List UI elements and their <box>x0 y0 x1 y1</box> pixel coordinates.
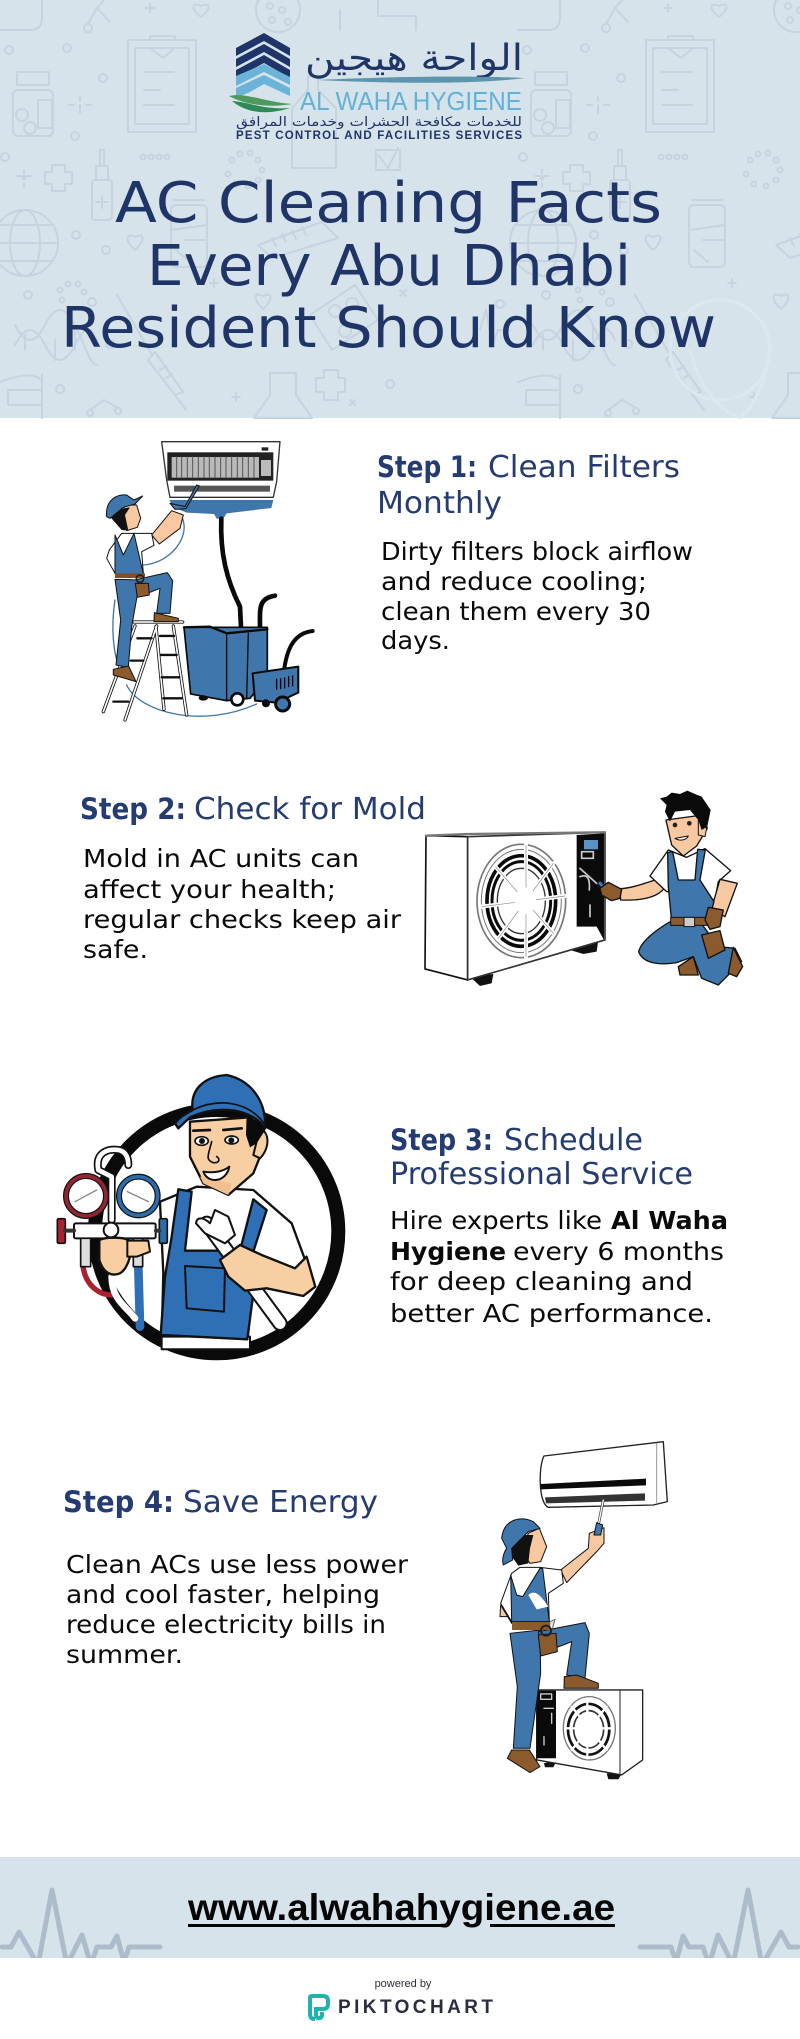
powered by piktochart <box>310 1978 493 2019</box>
step 3 body <box>390 1206 728 1328</box>
title <box>61 171 716 361</box>
english tagline: PEST CONTROL AND FACILITIES SERVICES <box>236 130 522 142</box>
footer band <box>0 1857 800 1965</box>
step 2 heading: Step 2: <box>80 792 186 826</box>
step 2 body: Mold in AC units can <box>83 844 359 873</box>
step 3 body: Al Waha <box>611 1206 728 1235</box>
arabic tagline: للخدمات مكافحة الحشرات وخدمات المرافق <box>236 115 522 130</box>
step 1 heading: Step 1: <box>377 450 477 484</box>
arabic name: الواحة هيجين <box>305 38 523 79</box>
step 3 body: Hygiene <box>390 1237 506 1266</box>
step 3 heading: Schedule <box>504 1123 643 1158</box>
step 2 heading: Check for Mold <box>194 792 426 827</box>
step 4 body: summer. <box>66 1640 183 1669</box>
step 1 body: days. <box>381 626 450 655</box>
step 1 body: and reduce cooling; <box>381 567 647 596</box>
step 3 heading <box>390 1123 693 1192</box>
decorative stripe <box>317 77 525 83</box>
illustration: step 1 technician cleaning AC with vacuum <box>103 442 313 720</box>
title: AC Cleaning Facts <box>115 171 662 236</box>
illustration: step 4 technician repairing wall AC, foot on outdoor unit <box>500 1442 667 1779</box>
powered by piktochart: PIKTOCHART <box>338 1997 493 2018</box>
step 1 heading <box>377 450 680 521</box>
title: Resident Should Know <box>61 296 716 361</box>
panel: header background <box>0 0 800 418</box>
step 3 body: Hire experts like <box>390 1206 602 1235</box>
illustration: step 2 outdoor unit and kneeling technician <box>425 791 743 986</box>
step 1 body: Dirty filters block airflow <box>381 537 693 566</box>
illustration: step 3 technician mascot in circle <box>57 1075 338 1353</box>
step 4 heading: Save Energy <box>183 1485 378 1520</box>
step 3 body: for deep cleaning and <box>390 1267 693 1296</box>
step 4 heading: Step 4: <box>63 1485 174 1519</box>
step 1 body <box>381 537 693 655</box>
step 3 body: better AC performance. <box>390 1299 713 1328</box>
step 4 heading <box>63 1485 378 1520</box>
icon: piktochart logo <box>310 1996 328 2019</box>
step 3 heading: Professional Service <box>390 1157 693 1192</box>
english name: AL WAHA HYGIENE <box>300 86 522 116</box>
step 4 body: Clean ACs use less power <box>66 1550 409 1579</box>
website url: www.alwahahygiene.ae <box>187 1887 615 1928</box>
step 1 body: clean them every 30 <box>381 597 651 626</box>
step 4 body <box>66 1550 409 1669</box>
step 4 text <box>63 1485 409 1669</box>
step 2 text <box>80 792 426 964</box>
step 3 body: every 6 months <box>513 1237 724 1266</box>
step 3 text <box>390 1123 728 1328</box>
step 1 text <box>377 450 693 655</box>
icon: building chevrons <box>229 33 292 112</box>
step 4 body: reduce electricity bills in <box>66 1610 386 1639</box>
step 2 body: regular checks keep air <box>83 905 402 934</box>
step 2 heading <box>80 792 426 827</box>
step 2 body: safe. <box>83 935 148 964</box>
powered by piktochart: powered by <box>375 1978 432 1990</box>
step 1 heading: Monthly <box>377 486 502 521</box>
step 3 heading: Step 3: <box>390 1123 493 1157</box>
title: Every Abu Dhabi <box>147 234 631 299</box>
logo <box>229 33 525 142</box>
ecg lines <box>2 1890 798 1965</box>
step 4 body: and cool faster, helping <box>66 1580 380 1609</box>
step 2 body: affect your health; <box>83 875 336 904</box>
step 2 body <box>83 844 402 964</box>
step 1 heading: Clean Filters <box>488 450 680 485</box>
